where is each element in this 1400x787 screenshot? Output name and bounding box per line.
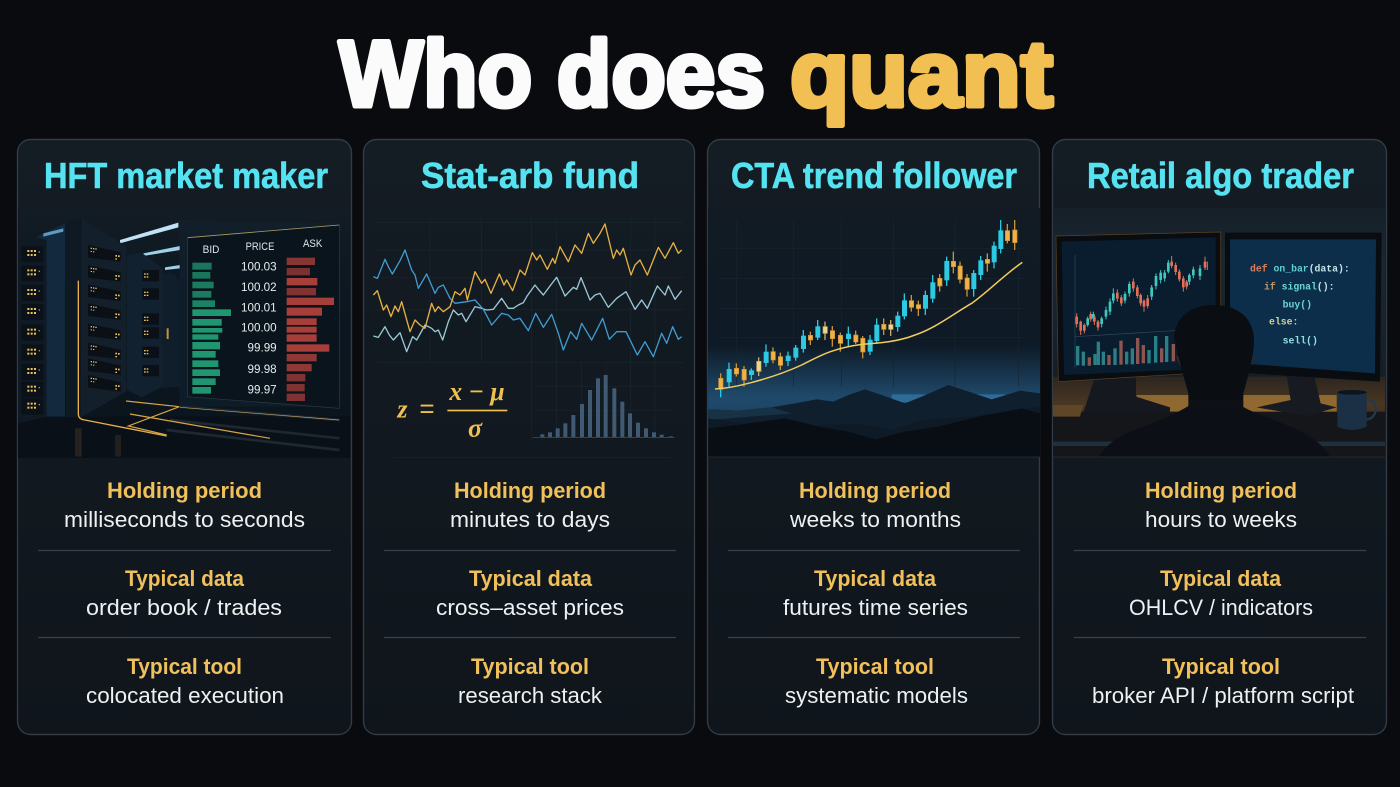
stat: holding period: Holding period bbox=[1145, 478, 1297, 503]
left monitor bbox=[1056, 232, 1221, 382]
price ladder: 100.00 bbox=[241, 321, 277, 334]
price ladder: 99.99 bbox=[247, 342, 277, 355]
right monitor with code: if signal(): bbox=[1264, 281, 1334, 292]
stat: holding period: milliseconds to seconds bbox=[64, 507, 305, 532]
stat: typical tool bbox=[86, 654, 284, 708]
series: pale blue bbox=[373, 277, 682, 352]
coffee mug bbox=[1337, 390, 1376, 430]
stat: typical data: cross–asset prices bbox=[436, 595, 624, 620]
stat: holding period: hours to weeks bbox=[1145, 507, 1297, 532]
title: Who does bbox=[339, 21, 765, 126]
stat: typical tool: broker API / platform script bbox=[1092, 683, 1354, 708]
stat: typical tool: Typical tool bbox=[1162, 654, 1280, 679]
panel: CTA trend follower bbox=[708, 140, 1040, 734]
stat: typical tool: research stack bbox=[458, 683, 603, 708]
stat: holding period bbox=[789, 478, 961, 532]
stat: typical data: futures time series bbox=[783, 595, 968, 620]
panel: HFT market maker bbox=[18, 140, 352, 734]
stat: typical tool: Typical tool bbox=[127, 654, 242, 679]
heading: Retail algo trader: Retail algo trader bbox=[1087, 155, 1354, 196]
monitor stands bbox=[1083, 377, 1170, 413]
z-score formula: = bbox=[419, 393, 435, 423]
stat: typical data bbox=[783, 566, 968, 620]
stat: holding period: weeks to months bbox=[789, 507, 961, 532]
illustration: trader at two monitors bbox=[1053, 208, 1385, 458]
ask bars bbox=[287, 258, 334, 401]
title: quant bbox=[790, 21, 1053, 126]
price ladder: 99.97 bbox=[247, 383, 277, 396]
series: gold bbox=[373, 224, 682, 332]
stat: holding period: minutes to days bbox=[450, 507, 610, 532]
right monitor with code: sell() bbox=[1283, 335, 1318, 346]
stat: typical tool: colocated execution bbox=[86, 683, 284, 708]
stat: holding period bbox=[450, 478, 610, 532]
price ladder: 100.02 bbox=[241, 281, 277, 294]
order book headers bbox=[203, 240, 322, 253]
heading: HFT market maker: HFT market maker bbox=[44, 155, 328, 196]
stat: typical data bbox=[1129, 566, 1313, 620]
series: blue bbox=[373, 250, 682, 357]
stat: holding period bbox=[1145, 478, 1297, 532]
stat: typical data: Typical data bbox=[469, 566, 593, 591]
stat: typical tool: Typical tool bbox=[816, 654, 934, 679]
illustration: candlesticks over mountains bbox=[708, 208, 1040, 458]
trader silhouette bbox=[1099, 305, 1331, 457]
right monitor with code: else: bbox=[1269, 317, 1298, 328]
panel: Retail algo trader bbox=[1052, 140, 1386, 734]
heading: CTA trend follower: CTA trend follower bbox=[731, 155, 1017, 196]
order book headers: PRICE bbox=[246, 241, 275, 253]
stat: typical tool bbox=[1092, 654, 1354, 708]
stat: typical data bbox=[86, 566, 282, 620]
title bbox=[339, 21, 1053, 126]
stat: typical data: Typical data bbox=[814, 566, 937, 591]
panel: Stat-arb fund bbox=[364, 140, 694, 734]
order book headers: BID bbox=[203, 244, 219, 256]
stat: holding period: Holding period bbox=[799, 478, 951, 503]
stat: typical tool: Typical tool bbox=[471, 654, 589, 679]
stat: typical tool bbox=[458, 654, 603, 708]
bid bars bbox=[192, 263, 231, 394]
z-score formula: σ bbox=[468, 414, 483, 443]
order book headers: ASK bbox=[303, 238, 323, 250]
price ladder: 100.03 bbox=[241, 261, 277, 274]
stat: typical data: order book / trades bbox=[86, 595, 282, 620]
illustration: price spreads, z-score and distribution bbox=[373, 213, 683, 457]
stat: typical data bbox=[436, 566, 624, 620]
z-score formula: z bbox=[396, 394, 408, 423]
stat: typical data: Typical data bbox=[1160, 566, 1282, 591]
mountains bbox=[708, 385, 1040, 457]
illustration: server racks and order book bbox=[18, 208, 350, 458]
code: def on_bar: def on_bar(data): bbox=[1250, 264, 1350, 275]
distribution histogram bbox=[533, 375, 674, 438]
z-score formula bbox=[396, 377, 507, 443]
stat: typical tool: systematic models bbox=[785, 683, 968, 708]
price ladder: 99.98 bbox=[247, 363, 277, 376]
stat: typical data: Typical data bbox=[125, 566, 245, 591]
desk bbox=[1053, 376, 1385, 412]
right monitor with code bbox=[1225, 233, 1382, 382]
stat: holding period: Holding period bbox=[454, 478, 606, 503]
stat: holding period: Holding period bbox=[107, 478, 262, 503]
price ladder bbox=[241, 261, 277, 396]
volume bars bbox=[1076, 336, 1175, 366]
price ladder: 100.01 bbox=[241, 301, 277, 314]
candlesticks bbox=[719, 220, 1017, 397]
z-score formula: x − μ bbox=[448, 377, 505, 406]
moving average line bbox=[715, 262, 1022, 389]
stat: typical tool bbox=[785, 654, 968, 708]
right monitor with code: buy() bbox=[1283, 299, 1312, 310]
stat: holding period bbox=[64, 478, 305, 532]
heading: Stat-arb fund: Stat-arb fund bbox=[421, 155, 639, 196]
stat: typical data: OHLCV / indicators bbox=[1129, 595, 1313, 620]
